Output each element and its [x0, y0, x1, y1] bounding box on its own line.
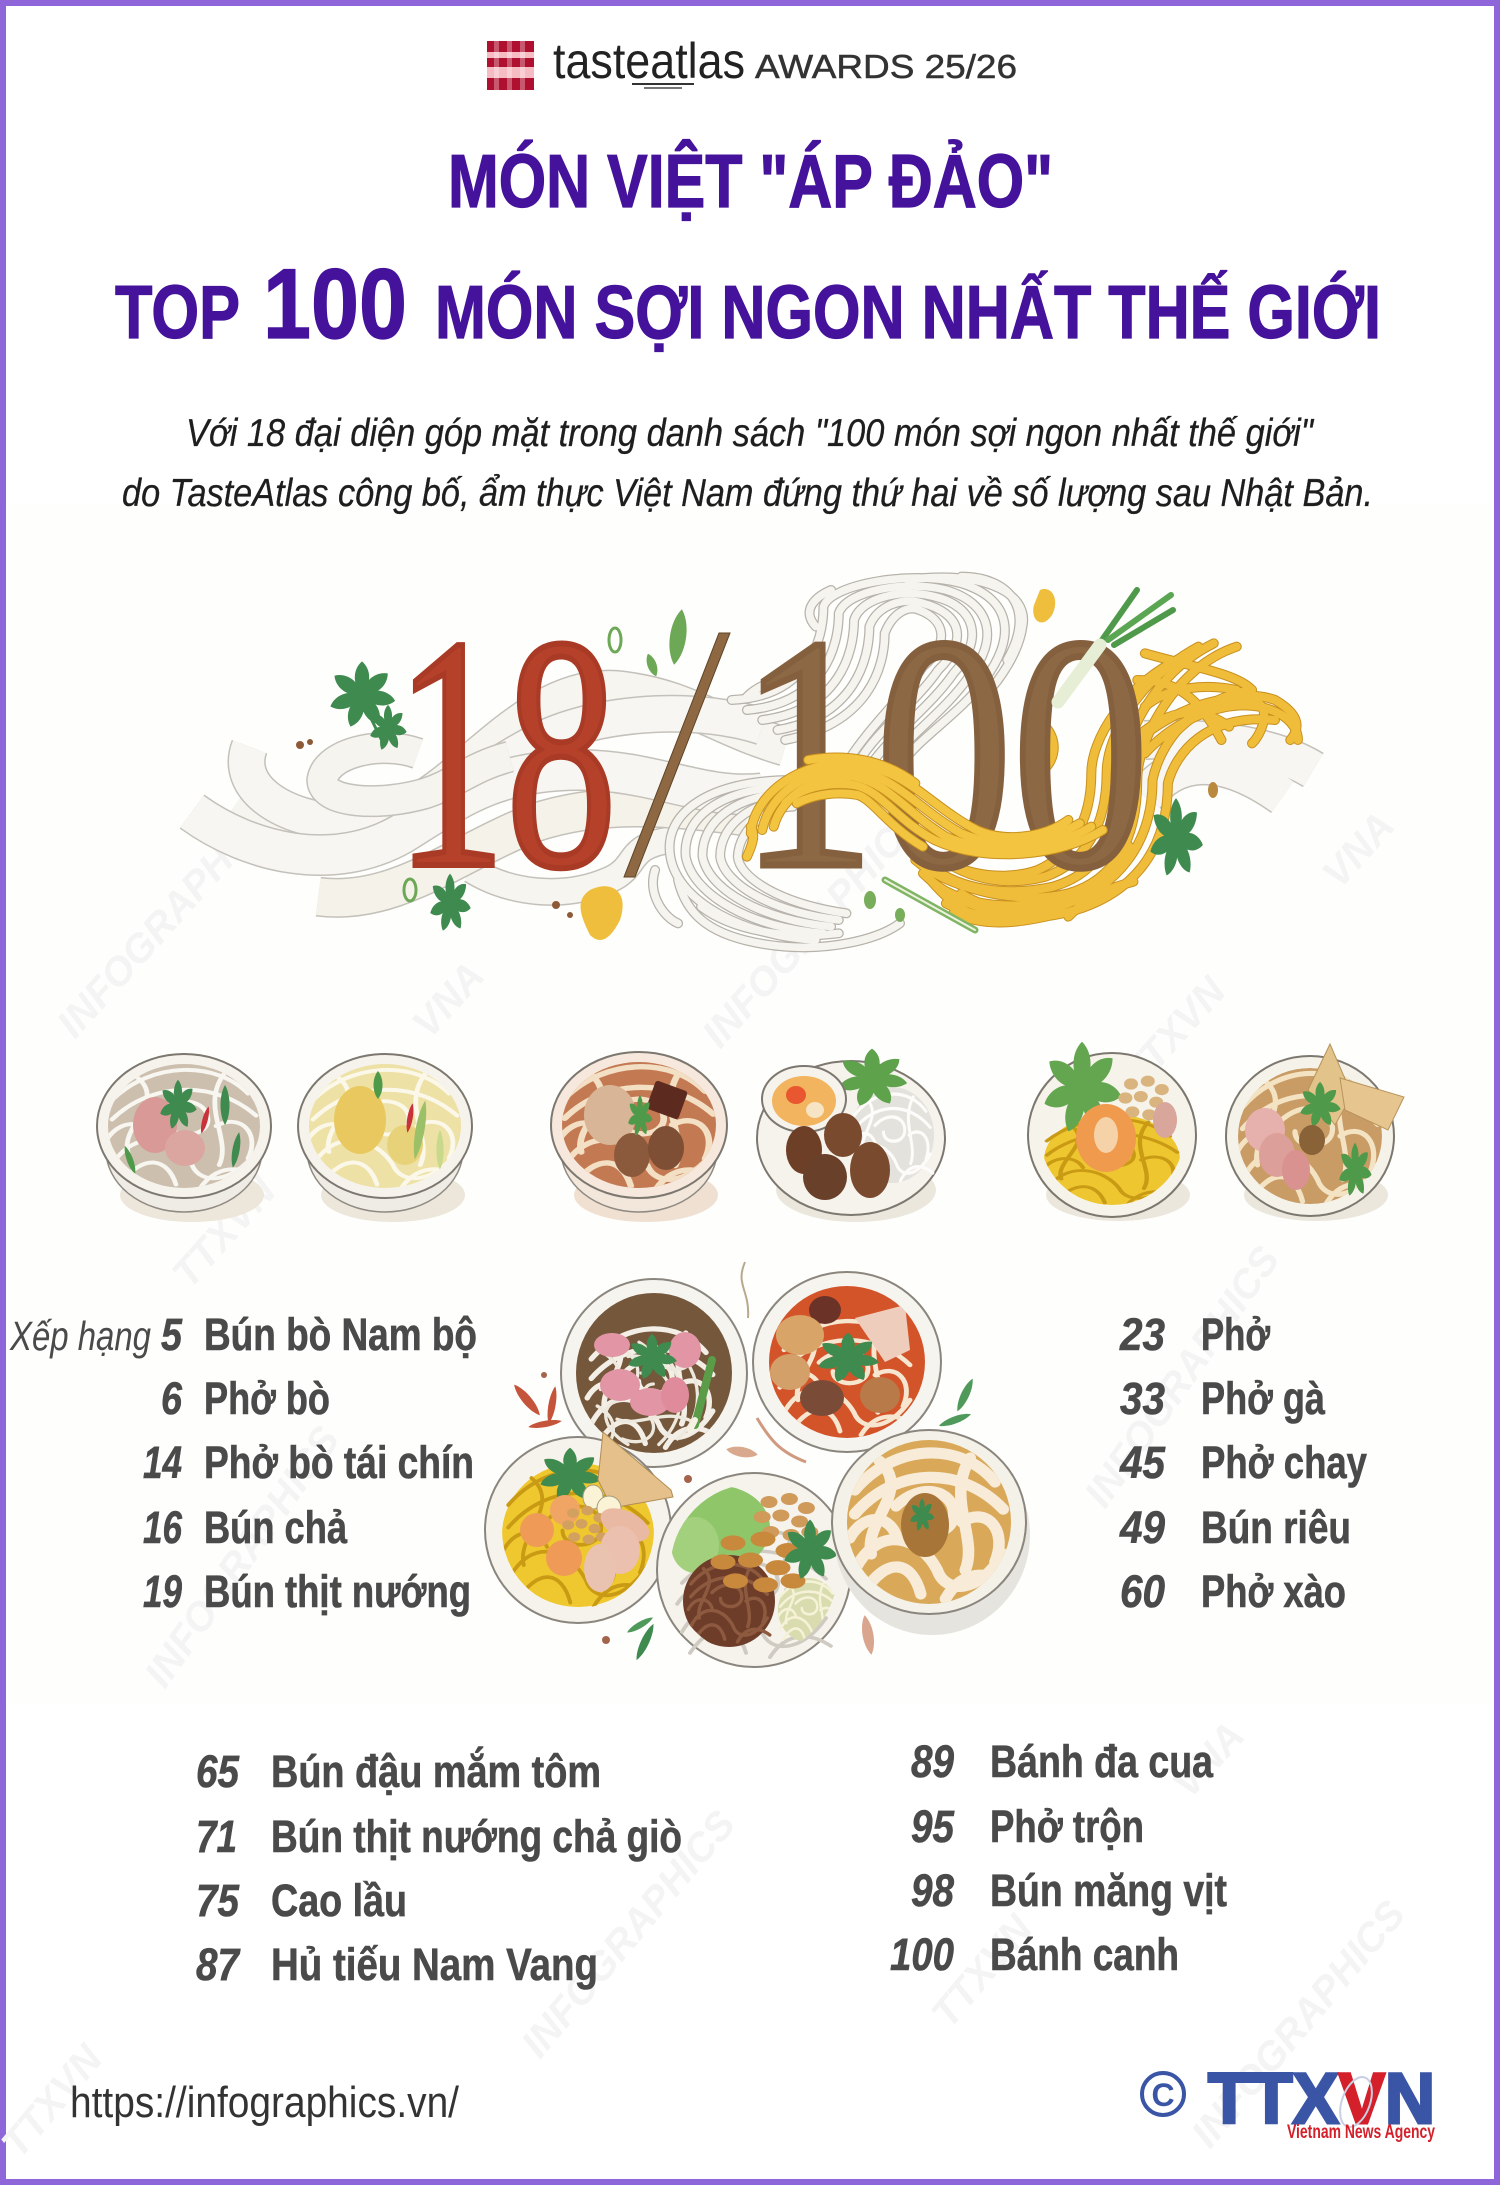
watermarks: TTXVN	[164, 1168, 285, 1296]
row 45: 45	[1119, 1437, 1166, 1488]
source url: https://infographics.vn/	[70, 2078, 460, 2127]
row 100	[890, 1929, 1179, 1980]
row 98	[911, 1865, 1227, 1916]
row 75: 75	[196, 1875, 240, 1926]
bowl: banh canh	[832, 1430, 1030, 1635]
row 23: 23	[1119, 1309, 1165, 1360]
plate: yellow noodles with shrimp	[485, 1432, 673, 1623]
intro text	[122, 412, 1373, 515]
bowl: pho ga	[298, 1054, 472, 1222]
watermarks: INFOGRAPHICS	[1076, 1238, 1288, 1515]
slash	[624, 633, 730, 877]
logo: TasteAtlas Awards: tasteatlas	[553, 33, 745, 89]
row 89	[911, 1736, 1214, 1787]
row 6: Phở bò	[204, 1373, 330, 1424]
row 33	[1120, 1373, 1326, 1424]
plate: bun bo salad	[657, 1473, 851, 1667]
logo: TasteAtlas Awards: AWARDS 25/26	[755, 48, 1017, 85]
title: 100	[263, 248, 407, 359]
row 100: Bánh canh	[990, 1929, 1179, 1980]
row 89: Bánh đa cua	[990, 1736, 1214, 1787]
row 65: Bún đậu mắm tôm	[271, 1746, 601, 1797]
plate: bun cha	[757, 1049, 945, 1222]
dish row: bun bo and bun cha	[551, 1049, 945, 1222]
watermarks: INFOGRAPHICS	[1183, 1892, 1414, 2156]
row 98: Bún măng vịt	[990, 1865, 1227, 1916]
herb: cilantro bottom	[429, 874, 471, 933]
bowl: bun bo	[551, 1052, 727, 1222]
row 16: 16	[143, 1502, 183, 1553]
row 23	[1119, 1309, 1270, 1360]
logo: TTXVN: TTXVN	[1208, 2060, 1435, 2139]
bowl: bun rieu red	[753, 1272, 941, 1452]
watermarks: VNA	[1314, 804, 1403, 896]
rice vermicelli coils	[653, 577, 1023, 947]
row 65: 65	[196, 1746, 240, 1797]
dish row: mi quang and cao lau	[1028, 1042, 1404, 1221]
title	[115, 139, 1381, 359]
bowl: pho with beef	[561, 1279, 747, 1467]
rank list: left bottom	[196, 1746, 682, 1990]
row 60: Phở xào	[1201, 1566, 1346, 1617]
icon: copyright	[1142, 2073, 1184, 2115]
row 19: Bún thịt nướng	[204, 1566, 471, 1617]
row 71: 71	[196, 1811, 237, 1862]
icon: copyright: C	[1151, 2077, 1175, 2113]
row 71: Bún thịt nướng chả giò	[271, 1811, 682, 1862]
herb: basil leaf	[666, 608, 690, 666]
green onion top	[885, 590, 1173, 930]
bowl: pho bo	[97, 1054, 271, 1222]
row 100: 100	[890, 1929, 954, 1980]
herb: cilantro left	[328, 661, 407, 751]
intro text: Với 18 đại diện góp mặt trong danh sách "100 món sợi ngon nhất thế giới"	[186, 412, 1315, 455]
watermarks: VNA	[1164, 1714, 1253, 1806]
row 87: 87	[196, 1939, 241, 1990]
row 75	[196, 1875, 407, 1926]
rank list: left top	[9, 1309, 477, 1617]
row 14: 14	[143, 1437, 182, 1488]
label: ranking: Xếp hạng	[9, 1313, 151, 1359]
row 33: Phở gà	[1201, 1373, 1326, 1424]
number 18: 18	[395, 569, 617, 938]
row 5: Bún bò Nam bộ	[204, 1309, 477, 1360]
row 23: Phở	[1201, 1309, 1270, 1360]
watermarks: TTXVN	[923, 1906, 1042, 2036]
herb: cilantro right	[1148, 798, 1204, 878]
row 16: Bún chả	[204, 1502, 348, 1553]
row 6	[161, 1373, 330, 1424]
logo: TasteAtlas Awards	[487, 33, 1017, 90]
watermarks	[0, 788, 1414, 2166]
row 75: Cao lầu	[271, 1875, 407, 1926]
watermarks: INFOGRAPHICS	[49, 788, 287, 1046]
watermarks: INFOGRAPHICS	[136, 1418, 348, 1695]
title: MÓN VIỆT "ÁP ĐẢO"	[448, 139, 1053, 223]
plate: mi quang	[1028, 1042, 1196, 1221]
row 14: Phở bò tái chín	[204, 1437, 474, 1488]
watermarks: VNA	[404, 954, 493, 1046]
dish row: two bowls pho	[97, 1054, 472, 1222]
rank list: right top	[1119, 1309, 1367, 1617]
row 89: 89	[911, 1736, 954, 1787]
yellow noodles back	[915, 643, 1298, 922]
row 19: 19	[143, 1566, 182, 1617]
dish cluster	[485, 1262, 1030, 1667]
row 19	[143, 1566, 471, 1617]
row 16	[143, 1502, 348, 1553]
row 95	[911, 1801, 1144, 1852]
icon: gingham square	[487, 41, 534, 90]
row 45	[1119, 1437, 1367, 1488]
garnish blobs	[296, 589, 1218, 940]
watermarks: INFOGRAPHICS	[694, 798, 932, 1056]
row 87: Hủ tiếu Nam Vang	[271, 1939, 598, 1990]
row 6: 6	[161, 1373, 183, 1424]
row 33: 33	[1120, 1373, 1165, 1424]
title: TOP	[115, 270, 240, 354]
row 95: 95	[911, 1801, 955, 1852]
logo: TTXVN: Vietnam News Agency	[1287, 2122, 1435, 2143]
watermarks: TTXVN	[1114, 968, 1235, 1096]
row 98: 98	[911, 1865, 954, 1916]
row 14	[143, 1437, 474, 1488]
row 60: 60	[1120, 1566, 1165, 1617]
number 100: 100	[739, 569, 1149, 938]
plate: cao lau	[1226, 1044, 1404, 1221]
row 49: Bún riêu	[1201, 1502, 1351, 1553]
row 49: 49	[1119, 1502, 1165, 1553]
yellow noodles front	[747, 758, 1103, 857]
hero illustration: 18/100 noodles	[192, 569, 1313, 947]
decorative leaves	[511, 1262, 976, 1662]
row 5: 5	[161, 1309, 183, 1360]
white ribbon noodles	[192, 690, 1313, 898]
row 45: Phở chay	[1201, 1437, 1367, 1488]
watermarks: INFOGRAPHICS	[513, 1802, 744, 2066]
rank list: right bottom	[890, 1736, 1227, 1980]
row 60	[1120, 1566, 1346, 1617]
row 95: Phở trộn	[990, 1801, 1144, 1852]
row 49	[1119, 1502, 1351, 1553]
